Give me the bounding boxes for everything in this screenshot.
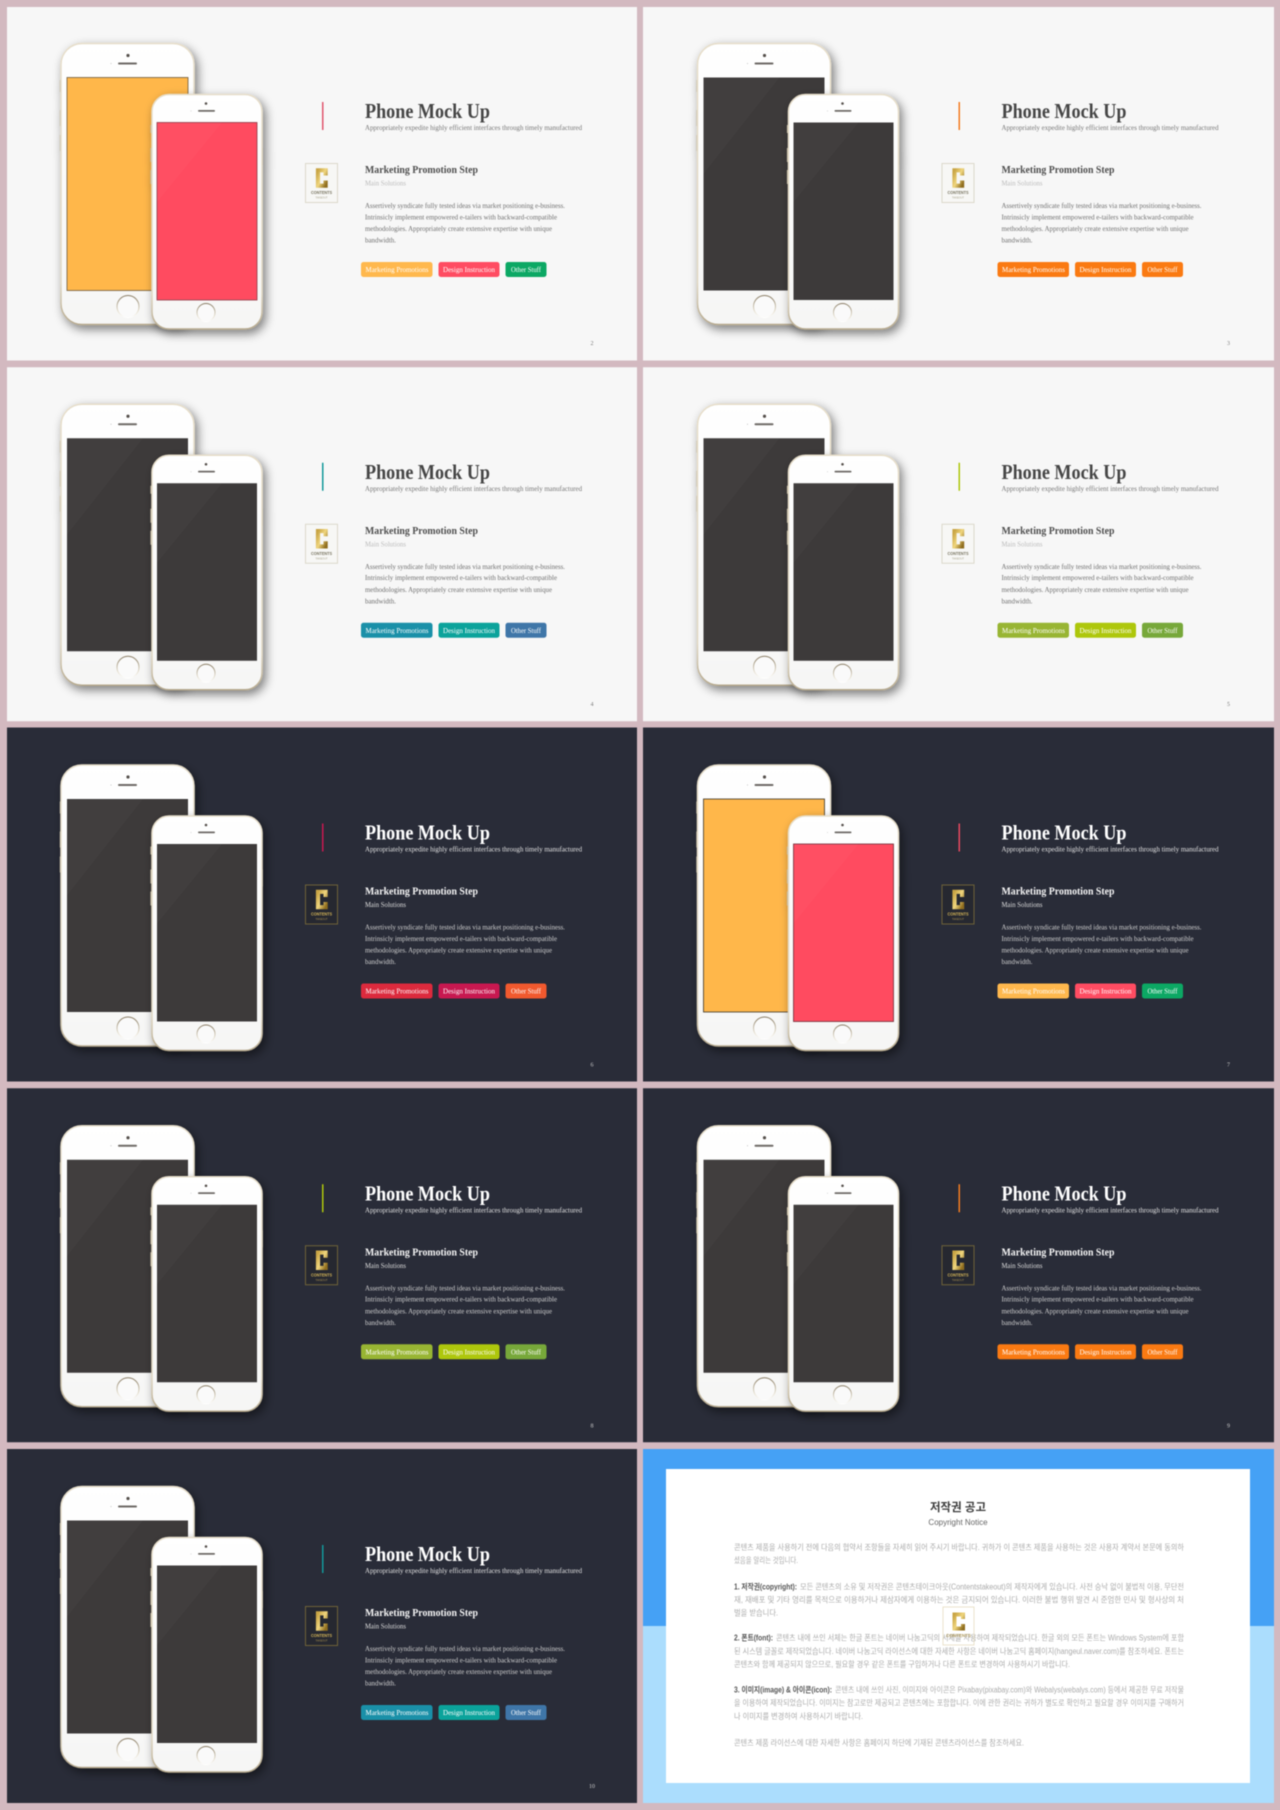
section subheading: Main Solutions	[1002, 539, 1043, 548]
notice subheading: Copyright Notice	[928, 1518, 988, 1527]
accent bar	[958, 463, 960, 491]
body text: Assertively syndicate fully tested ideas via market positioning e-business.	[1002, 562, 1202, 571]
subtitle: Appropriately expedite highly efficient interfaces through timely manufactured	[365, 123, 582, 132]
tag buttons	[361, 1344, 546, 1359]
logo	[942, 524, 974, 563]
clause 3 image and icon: 을 이용하여 제작되었습니다. 이미지는 참고로만 제공되고 콘텐츠에는 포함합니다. 이에 관한 권리는 귀하가 별도로 확인하고 필요할 경우 이미지를 구매하거	[734, 1698, 1184, 1708]
tag buttons: Marketing Promotions	[1002, 265, 1065, 274]
tag buttons	[998, 262, 1183, 277]
tag buttons: Marketing Promotions	[1002, 1347, 1065, 1356]
body text	[365, 562, 565, 605]
page number: 5	[1227, 702, 1230, 708]
body text: bandwidth.	[365, 1318, 396, 1327]
body text: Assertively syndicate fully tested ideas via market positioning e-business.	[365, 201, 565, 210]
logo: TAKEOUT	[315, 1638, 328, 1642]
subtitle: Appropriately expedite highly efficient interfaces through timely manufactured	[365, 844, 582, 854]
section subheading: Main Solutions	[365, 900, 406, 909]
body text: methodologies. Appropriately create extensive expertise with unique	[1002, 224, 1189, 233]
clause 2 font	[734, 1632, 1185, 1669]
body text: methodologies. Appropriately create extensive expertise with unique	[365, 1667, 553, 1676]
body text: bandwidth.	[365, 236, 396, 245]
body text: Assertively syndicate fully tested ideas via market positioning e-business.	[1002, 201, 1202, 210]
logo: CONTENTS	[311, 551, 332, 556]
intro paragraph: 콘텐츠 제품을 사용하기 전에 다음의 협약서 조항들을 자세히 읽어 주시기 바랍니다. 귀하가 이 콘텐츠 제품을 사용하는 것은 사용자 계약서 본문에 동의하	[734, 1542, 1185, 1552]
clause 1 copyright: 1. 저작권(copyright):	[734, 1582, 797, 1592]
logo	[306, 164, 338, 202]
logo: TAKEOUT	[315, 196, 328, 200]
body text	[1002, 562, 1202, 605]
panel: slide 5 light lime	[643, 367, 1274, 721]
notice heading: 저작권 공고	[930, 1500, 986, 1514]
clause 3 image and icon: 3. 이미지(image) & 아이콘(icon):	[734, 1684, 832, 1694]
title: Phone Mock Up	[1002, 460, 1126, 484]
body text: Intrinsicly implement empowered e-tailers with backward-compatible	[1002, 934, 1194, 943]
clause 3 image and icon: 나 이미지를 변경하여 사용하시기 바랍니다.	[734, 1711, 863, 1721]
body text: Intrinsicly implement empowered e-tailers with backward-compatible	[365, 1655, 558, 1664]
panel: slide 3 light orange	[643, 7, 1274, 360]
tag buttons: Other Stuff	[1148, 626, 1178, 635]
tag buttons: Design Instruction	[443, 986, 495, 996]
clause 2 font: 콘텐츠와 함께 제공되지 않으므로, 필요할 경우 같은 폰트를 구입하거나 다른 폰트로 변경하여 사용하시기 바랍니다.	[734, 1659, 1070, 1669]
title: Phone Mock Up	[1002, 99, 1126, 123]
tag buttons: Other Stuff	[511, 986, 541, 996]
page number: 4	[590, 702, 594, 708]
subtitle: Appropriately expedite highly efficient interfaces through timely manufactured	[365, 1566, 582, 1575]
clause 1 copyright: 벌을 받습니다.	[734, 1608, 778, 1618]
panel: slide 8 dark lime	[7, 1088, 637, 1442]
intro paragraph: 셨음을 알리는 것입니다.	[734, 1555, 798, 1565]
tag buttons: Marketing Promotions	[366, 1708, 429, 1717]
subtitle: Appropriately expedite highly efficient interfaces through timely manufactured	[1002, 484, 1219, 493]
clause 1 copyright: 모든 콘텐츠의 소유 및 저작권은 콘텐츠테이크아웃(Contentstakeout)의 제작자에게 있습니다. 사전 승낙 없이 불법적 이용, 무단전	[800, 1582, 1184, 1592]
clause 2 font: 2. 폰트(font):	[734, 1634, 773, 1642]
body text: Assertively syndicate fully tested ideas via market positioning e-business.	[365, 1644, 565, 1653]
body text	[365, 201, 565, 245]
clause 3 image and icon: 콘텐츠 내에 쓰인 사진, 이미지와 아이콘은 Pixabay(pixabay.com)와 Webalys(webalys.com) 등에서 제공한 무료 저작물	[835, 1684, 1184, 1694]
body text: Assertively syndicate fully tested ideas via market positioning e-business.	[365, 922, 565, 932]
accent bar	[322, 102, 324, 130]
tag buttons: Design Instruction	[443, 265, 495, 274]
phones mockup	[696, 1126, 899, 1411]
logo: CONTENTS	[311, 1272, 332, 1277]
section subheading: Main Solutions	[365, 539, 406, 548]
title: Phone Mock Up	[365, 1542, 490, 1566]
body text: Intrinsicly implement empowered e-tailers with backward-compatible	[1002, 1295, 1194, 1304]
body text: Assertively syndicate fully tested ideas via market positioning e-business.	[365, 562, 565, 571]
tag buttons: Marketing Promotions	[366, 986, 429, 996]
tag buttons: Other Stuff	[1148, 986, 1178, 996]
logo	[306, 1246, 338, 1285]
body text: Intrinsicly implement empowered e-tailers with backward-compatible	[1002, 212, 1194, 221]
section heading: Marketing Promotion Step	[1002, 1246, 1114, 1258]
tag buttons: Marketing Promotions	[1002, 626, 1065, 635]
logo: TAKEOUT	[952, 196, 964, 200]
watermark logo	[943, 1607, 974, 1645]
accent bar	[958, 1184, 960, 1212]
phones mockup	[60, 1486, 263, 1772]
body text: bandwidth.	[1002, 957, 1033, 966]
clause 2 font: 된 시스템 글꼴로 제작되었습니다. 네이버 나눔고딕 라이선스에 대한 자세한 사항은 네이버 나눔고딕 홈페이지(hangeul.naver.com)를 참조하세요. 폰트는	[734, 1646, 1184, 1656]
logo	[306, 885, 338, 924]
tag buttons: Design Instruction	[443, 1708, 495, 1717]
tag buttons: Design Instruction	[1080, 626, 1132, 635]
intro paragraph	[734, 1542, 1185, 1565]
body text: methodologies. Appropriately create extensive expertise with unique	[1002, 946, 1189, 954]
page number: 3	[1227, 341, 1230, 347]
body text: methodologies. Appropriately create extensive expertise with unique	[365, 224, 553, 233]
body text: Intrinsicly implement empowered e-tailers with backward-compatible	[365, 212, 558, 221]
section subheading: Main Solutions	[365, 1622, 406, 1630]
section subheading: Main Solutions	[365, 178, 406, 188]
tag buttons: Marketing Promotions	[366, 265, 429, 274]
title: Phone Mock Up	[1002, 1181, 1126, 1205]
logo: CONTENTS	[311, 190, 332, 195]
section heading: Marketing Promotion Step	[1002, 525, 1114, 537]
phones mockup	[60, 44, 263, 329]
logo	[306, 1606, 338, 1646]
accent bar	[322, 1545, 324, 1573]
section heading: Marketing Promotion Step	[365, 1246, 478, 1258]
panel: copyright notice slide	[643, 1449, 1274, 1803]
title: Phone Mock Up	[365, 1181, 490, 1205]
logo: TAKEOUT	[952, 917, 964, 921]
tag buttons	[998, 984, 1183, 998]
tag buttons: Design Instruction	[443, 1347, 495, 1356]
body text	[365, 922, 565, 966]
phones mockup	[696, 765, 899, 1050]
section subheading: Main Solutions	[365, 1261, 406, 1270]
tag buttons: Other Stuff	[511, 265, 541, 274]
phones mockup	[60, 765, 263, 1050]
body text: Assertively syndicate fully tested ideas via market positioning e-business.	[365, 1283, 565, 1292]
phones mockup	[60, 1126, 263, 1411]
section heading: Marketing Promotion Step	[365, 525, 478, 537]
section heading: Marketing Promotion Step	[1002, 886, 1114, 898]
body text: bandwidth.	[365, 957, 396, 966]
body text: methodologies. Appropriately create extensive expertise with unique	[365, 585, 553, 594]
tag buttons	[998, 1344, 1183, 1359]
section heading: Marketing Promotion Step	[365, 164, 478, 176]
phones mockup	[60, 404, 263, 690]
subtitle: Appropriately expedite highly efficient interfaces through timely manufactured	[1002, 1205, 1219, 1214]
closing line: 콘텐츠 제품 라이선스에 대한 자세한 사항은 홈페이지 하단에 기재된 콘텐츠라이선스를 참조하세요.	[734, 1738, 1024, 1748]
phones mockup	[696, 44, 899, 329]
logo: TAKEOUT	[315, 1278, 328, 1282]
body text: Assertively syndicate fully tested ideas via market positioning e-business.	[1002, 1283, 1202, 1292]
section heading: Marketing Promotion Step	[365, 886, 478, 898]
logo	[942, 1246, 974, 1285]
tag buttons: Design Instruction	[443, 626, 495, 635]
body text: Intrinsicly implement empowered e-tailers with backward-compatible	[1002, 573, 1194, 582]
watermark logo: CONTENTS	[946, 1633, 971, 1638]
body text	[1002, 922, 1202, 966]
page number: 6	[590, 1062, 594, 1068]
body text: Intrinsicly implement empowered e-tailers with backward-compatible	[365, 1295, 558, 1304]
logo: TAKEOUT	[952, 1278, 964, 1282]
title: Phone Mock Up	[365, 460, 490, 484]
subtitle: Appropriately expedite highly efficient interfaces through timely manufactured	[365, 484, 582, 493]
logo: CONTENTS	[948, 551, 968, 556]
subtitle: Appropriately expedite highly efficient interfaces through timely manufactured	[1002, 123, 1219, 132]
accent bar	[958, 824, 960, 852]
tag buttons: Marketing Promotions	[366, 1347, 429, 1356]
section heading: Marketing Promotion Step	[1002, 164, 1114, 176]
panel: slide 2 light with coloured phones	[7, 7, 637, 360]
panel: slide 10 dark teal	[7, 1449, 637, 1803]
body text	[1002, 1283, 1202, 1327]
tag buttons	[361, 623, 546, 638]
title: Phone Mock Up	[365, 99, 490, 123]
page number: 7	[1227, 1062, 1230, 1068]
logo	[942, 164, 974, 202]
tag buttons: Other Stuff	[511, 1347, 541, 1356]
logo: TAKEOUT	[952, 556, 964, 560]
section subheading: Main Solutions	[1002, 900, 1043, 909]
tag buttons: Design Instruction	[1080, 265, 1132, 274]
panel: slide 6 dark crimson	[7, 728, 637, 1082]
body text	[1002, 201, 1202, 245]
logo: CONTENTS	[948, 1272, 968, 1277]
tag buttons: Design Instruction	[1080, 1347, 1132, 1356]
body text: Assertively syndicate fully tested ideas via market positioning e-business.	[1002, 922, 1202, 932]
logo: CONTENTS	[311, 1633, 332, 1638]
body text: bandwidth.	[365, 596, 396, 605]
tag buttons: Marketing Promotions	[1002, 986, 1065, 996]
clause 2 font: 콘텐츠 내에 쓰인 서체는 한글 폰트는 네이버 나눔고딕의 서체를 사용하여 제작되었습니다. 한글 외의 모든 폰트는 Windows System에 포함	[776, 1632, 1185, 1642]
tag buttons: Other Stuff	[511, 626, 541, 635]
body text: bandwidth.	[1002, 236, 1033, 245]
tag buttons: Design Instruction	[1080, 986, 1132, 996]
section subheading: Main Solutions	[1002, 1261, 1043, 1270]
panel: slide 7 dark with coloured phones	[643, 728, 1274, 1082]
body text: methodologies. Appropriately create extensive expertise with unique	[365, 1306, 553, 1315]
body text: bandwidth.	[1002, 1318, 1033, 1327]
panel: slide 4 light teal	[7, 367, 637, 721]
title: Phone Mock Up	[1002, 820, 1126, 844]
page number: 2	[590, 341, 594, 347]
body text: methodologies. Appropriately create extensive expertise with unique	[365, 946, 553, 954]
tag buttons	[998, 623, 1183, 638]
clause 1 copyright	[734, 1582, 1184, 1618]
tag buttons: Other Stuff	[1148, 265, 1178, 274]
title: Phone Mock Up	[365, 820, 490, 844]
accent bar	[322, 1184, 324, 1212]
subtitle: Appropriately expedite highly efficient interfaces through timely manufactured	[1002, 844, 1219, 854]
accent bar	[322, 824, 324, 852]
body text: Intrinsicly implement empowered e-tailers with backward-compatible	[365, 573, 558, 582]
tag buttons	[361, 984, 546, 998]
phones mockup	[696, 404, 899, 690]
tag buttons: Other Stuff	[511, 1708, 541, 1717]
clause 3 image and icon	[734, 1684, 1184, 1721]
logo	[306, 524, 338, 563]
logo: CONTENTS	[948, 190, 968, 195]
tag buttons: Marketing Promotions	[366, 626, 429, 635]
accent bar	[958, 102, 960, 130]
body text: bandwidth.	[1002, 596, 1033, 605]
logo: TAKEOUT	[315, 917, 328, 921]
body text: methodologies. Appropriately create extensive expertise with unique	[1002, 585, 1189, 594]
page number: 10	[589, 1784, 595, 1790]
body text: Intrinsicly implement empowered e-tailers with backward-compatible	[365, 934, 558, 943]
tag buttons: Other Stuff	[1148, 1347, 1178, 1356]
body text: methodologies. Appropriately create extensive expertise with unique	[1002, 1306, 1189, 1315]
tag buttons	[361, 1705, 546, 1720]
page number: 9	[1227, 1423, 1230, 1429]
logo: CONTENTS	[311, 912, 332, 916]
panel: slide 9 dark orange	[643, 1088, 1274, 1442]
accent bar	[322, 463, 324, 491]
page number: 8	[590, 1423, 594, 1429]
logo	[942, 885, 974, 924]
tag buttons	[361, 262, 546, 277]
clause 1 copyright: 재, 재배포 및 기타 영리를 목적으로 이용하거나 제삼자에게 이용하는 것은 금지되어 있습니다. 이러한 불법 행위 발견 시 준엄한 민사 및 형사상의 처	[734, 1594, 1184, 1604]
section subheading: Main Solutions	[1002, 178, 1043, 188]
section heading: Marketing Promotion Step	[365, 1607, 478, 1619]
body text	[365, 1283, 565, 1327]
subtitle: Appropriately expedite highly efficient interfaces through timely manufactured	[365, 1205, 582, 1214]
logo: CONTENTS	[948, 912, 968, 916]
body text: bandwidth.	[365, 1679, 396, 1688]
logo: TAKEOUT	[315, 556, 328, 560]
body text	[365, 1644, 565, 1688]
